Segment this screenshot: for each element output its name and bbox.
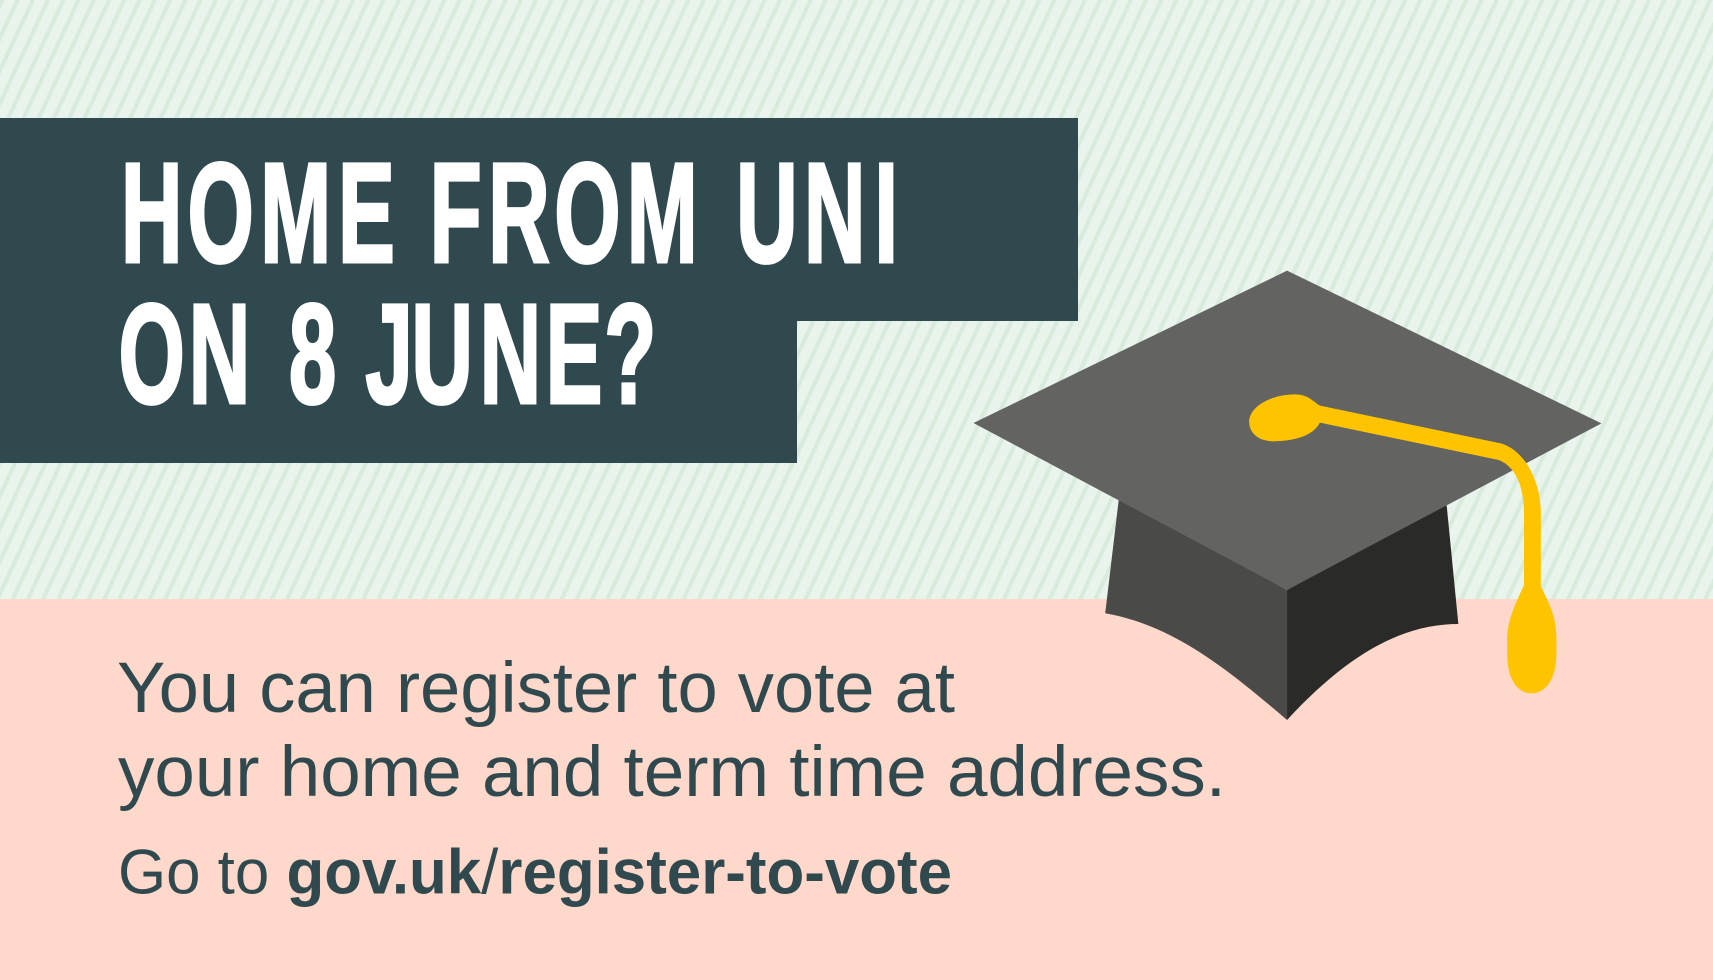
title <box>119 133 898 433</box>
icon: graduation cap <box>973 271 1601 720</box>
message line 2: your home and term time address. <box>118 733 1226 812</box>
title line 2: ON 8 JUNE? <box>119 274 656 433</box>
cap right side <box>1287 500 1458 720</box>
panel: dark heading banner <box>0 118 1078 463</box>
cap left side <box>1105 497 1287 720</box>
panel: striped green background <box>0 0 1713 599</box>
title line 1: HOME FROM UNI <box>121 133 898 292</box>
text block: website link: Go to gov.uk/register-to-vote <box>118 838 952 908</box>
mortarboard top <box>973 271 1601 590</box>
panel: pink lower background <box>0 599 1713 980</box>
message line 1: You can register to vote at <box>117 649 955 728</box>
gold tassel <box>1249 394 1556 693</box>
text block: registration message <box>117 649 1226 812</box>
